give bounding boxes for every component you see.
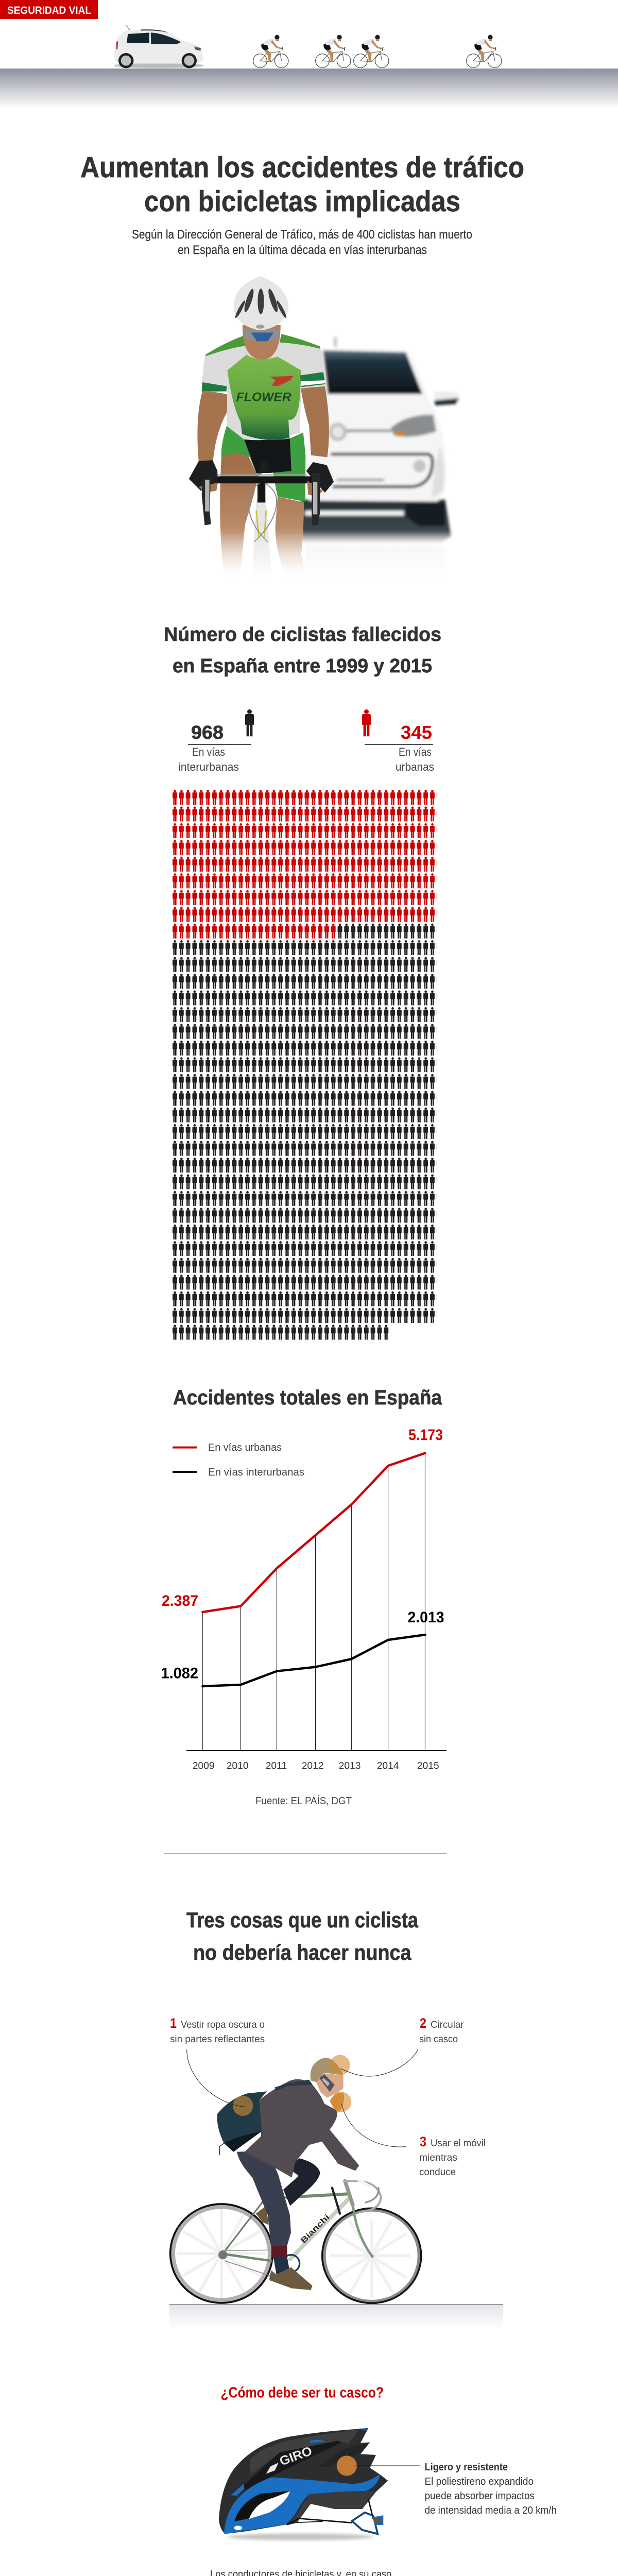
rider hand bbox=[330, 2093, 344, 2111]
cyclist jersey bbox=[202, 334, 326, 440]
callout 1: Vestir ropa oscura o bbox=[181, 2020, 265, 2030]
stat: 968 interurban: En vías bbox=[192, 745, 225, 758]
heading: three things bbox=[186, 1908, 419, 1964]
callout curves bbox=[187, 2049, 418, 2147]
rear wheel bbox=[170, 2204, 272, 2303]
callout 3: mientras bbox=[419, 2153, 457, 2163]
stat: 345 urban bbox=[362, 709, 434, 773]
photo: blue and black helmet bbox=[219, 2428, 420, 2540]
callout 2 bbox=[419, 2015, 464, 2045]
rider near leg bbox=[237, 2151, 291, 2248]
heading: helmet: ¿Cómo debe ser tu casco? bbox=[220, 2385, 384, 2401]
top road band bbox=[0, 69, 618, 109]
line chart: accidents 2009-2015: 2.013 bbox=[408, 1609, 444, 1626]
hero image: cyclist and car bbox=[165, 276, 490, 578]
heading: three things: no debería hacer nunca bbox=[193, 1940, 411, 1964]
frame logo: Bianchi bbox=[299, 2213, 332, 2245]
retention straps bbox=[287, 2499, 383, 2534]
callout 3: Usar el móvil bbox=[431, 2138, 486, 2149]
bicycle frame bbox=[218, 2180, 381, 2276]
orange marker 2 bbox=[330, 2055, 350, 2075]
icon: small cyclist 1 bbox=[253, 35, 288, 67]
ground under bicycle bbox=[169, 2304, 503, 2329]
line chart: accidents 2009-2015: 5.173 bbox=[408, 1427, 443, 1444]
stat: 968 interurban: interurbanas bbox=[178, 760, 239, 773]
panel: fatalities pictogram bbox=[164, 624, 441, 1342]
line chart: accidents 2009-2015: 2014 bbox=[377, 1761, 399, 1772]
orange marker bbox=[337, 2455, 357, 2476]
chart legend: En vías urbanas bbox=[208, 1442, 282, 1453]
callout 3: 3 bbox=[420, 2134, 426, 2149]
subtitle: en España en la última década en vías interurbanas bbox=[178, 243, 427, 257]
callout 1: 1 bbox=[170, 2015, 177, 2031]
helmet liner bbox=[287, 2491, 374, 2526]
callout 2: sin casco bbox=[419, 2034, 458, 2045]
orange marker 3 bbox=[331, 2092, 351, 2112]
line chart: accidents 2009-2015: 2009 bbox=[193, 1761, 215, 1772]
heading: number of dead cyclists: en España entre 1999 y 2015 bbox=[173, 655, 432, 677]
line chart: accidents 2009-2015: 2015 bbox=[417, 1761, 439, 1772]
callout 2: Circular bbox=[431, 2020, 464, 2030]
stat: 968 interurban: 968 bbox=[191, 722, 224, 743]
stat: 345 urban: 345 bbox=[401, 722, 432, 743]
small logo bbox=[234, 2526, 242, 2530]
bottom fade bbox=[165, 532, 490, 578]
heading: three things: Tres cosas que un ciclista bbox=[186, 1908, 419, 1932]
helmet note: Ligero y resistente bbox=[424, 2462, 508, 2473]
rider head bbox=[311, 2058, 344, 2098]
panel: helmet bbox=[210, 2385, 557, 2576]
rider jacket bbox=[245, 2079, 359, 2178]
cyclist head and helmet bbox=[234, 276, 288, 360]
leader line bbox=[355, 2465, 420, 2466]
line chart: accidents 2009-2015: 2012 bbox=[302, 1761, 324, 1772]
helmet vent bbox=[234, 2491, 290, 2521]
line chart: accidents 2009-2015 bbox=[161, 1427, 447, 1772]
cyclist jersey: FLOWER bbox=[236, 391, 291, 404]
line chart: accidents 2009-2015: 2010 bbox=[227, 1761, 249, 1772]
icon: small cyclist 4 bbox=[467, 35, 502, 67]
title: con bicicletas implicadas bbox=[144, 185, 460, 218]
backpack bbox=[217, 2080, 318, 2155]
helmet note: El poliestireno expandido bbox=[424, 2476, 534, 2487]
line chart: accidents 2009-2015: 2.387 bbox=[162, 1592, 198, 1609]
chart legend: En vías interurbanas bbox=[208, 1467, 304, 1478]
orange marker 1 bbox=[233, 2096, 253, 2116]
rider shirt bbox=[295, 2138, 308, 2162]
helmet shell bbox=[219, 2428, 388, 2534]
heading: number of dead cyclists: Número de ciclistas fallecidos bbox=[164, 624, 441, 646]
panel: header and hero bbox=[0, 0, 618, 569]
blurred white car bbox=[301, 337, 459, 577]
heading: total accidents: Accidentes totales en España bbox=[173, 1386, 442, 1409]
banner: seguridad vial bbox=[0, 0, 98, 19]
banner: seguridad vial: SEGURIDAD VIAL bbox=[7, 5, 91, 16]
icon: small white car side view bbox=[114, 25, 204, 69]
panel: accidents chart bbox=[161, 1386, 447, 1854]
rider far leg and shoe bbox=[256, 2157, 320, 2225]
callout 1 bbox=[170, 2015, 265, 2045]
helmet note bbox=[424, 2462, 557, 2516]
photo: man riding a bicycle bbox=[170, 2049, 421, 2303]
cyclist legs bbox=[220, 453, 306, 577]
subtitle: Según la Dirección General de Tráfico, más de 400 ciclistas han muerto bbox=[132, 228, 472, 242]
callout 3 bbox=[419, 2134, 486, 2178]
cyclist shorts bbox=[221, 426, 305, 501]
bike and handlebars bbox=[189, 460, 334, 577]
helmet logo: GIRO bbox=[278, 2444, 314, 2469]
pictogram grid: 345 red and 968 black figures bbox=[173, 790, 437, 1342]
cyclist arms bbox=[197, 386, 329, 462]
stat: 345 urban: En vías bbox=[399, 745, 432, 758]
callout 2: 2 bbox=[420, 2015, 426, 2031]
stat: 345 urban: urbanas bbox=[396, 760, 434, 773]
sock and shoe bbox=[269, 2246, 313, 2290]
blue body bbox=[224, 2474, 380, 2534]
subtitle bbox=[132, 228, 472, 257]
title bbox=[80, 151, 524, 218]
line chart: accidents 2009-2015: 2013 bbox=[339, 1761, 361, 1772]
helmet logo bbox=[266, 2444, 314, 2474]
panel: three things bbox=[169, 1908, 503, 2321]
source: Fuente: EL PAÍS, DGT bbox=[255, 1795, 352, 1807]
callout 1: sin partes reflectantes bbox=[170, 2034, 265, 2045]
helmet note: de intensidad media a 20 km/h bbox=[424, 2505, 557, 2516]
line chart: accidents 2009-2015: 1.082 bbox=[161, 1665, 198, 1682]
helmet band bbox=[244, 2441, 341, 2490]
icon: small cyclist 2 bbox=[316, 35, 351, 67]
chart legend bbox=[173, 1442, 304, 1478]
stat: 968 interurban bbox=[178, 709, 254, 773]
line chart: accidents 2009-2015: 2011 bbox=[266, 1761, 287, 1772]
callout 3: conduce bbox=[419, 2167, 456, 2178]
helmet note: puede absorber impactos bbox=[424, 2490, 535, 2502]
icon: small cyclist 3 bbox=[354, 35, 389, 67]
front wheel bbox=[322, 2208, 421, 2303]
heading: number of dead cyclists bbox=[164, 624, 441, 677]
title: Aumentan los accidentes de tráfico bbox=[80, 151, 524, 184]
